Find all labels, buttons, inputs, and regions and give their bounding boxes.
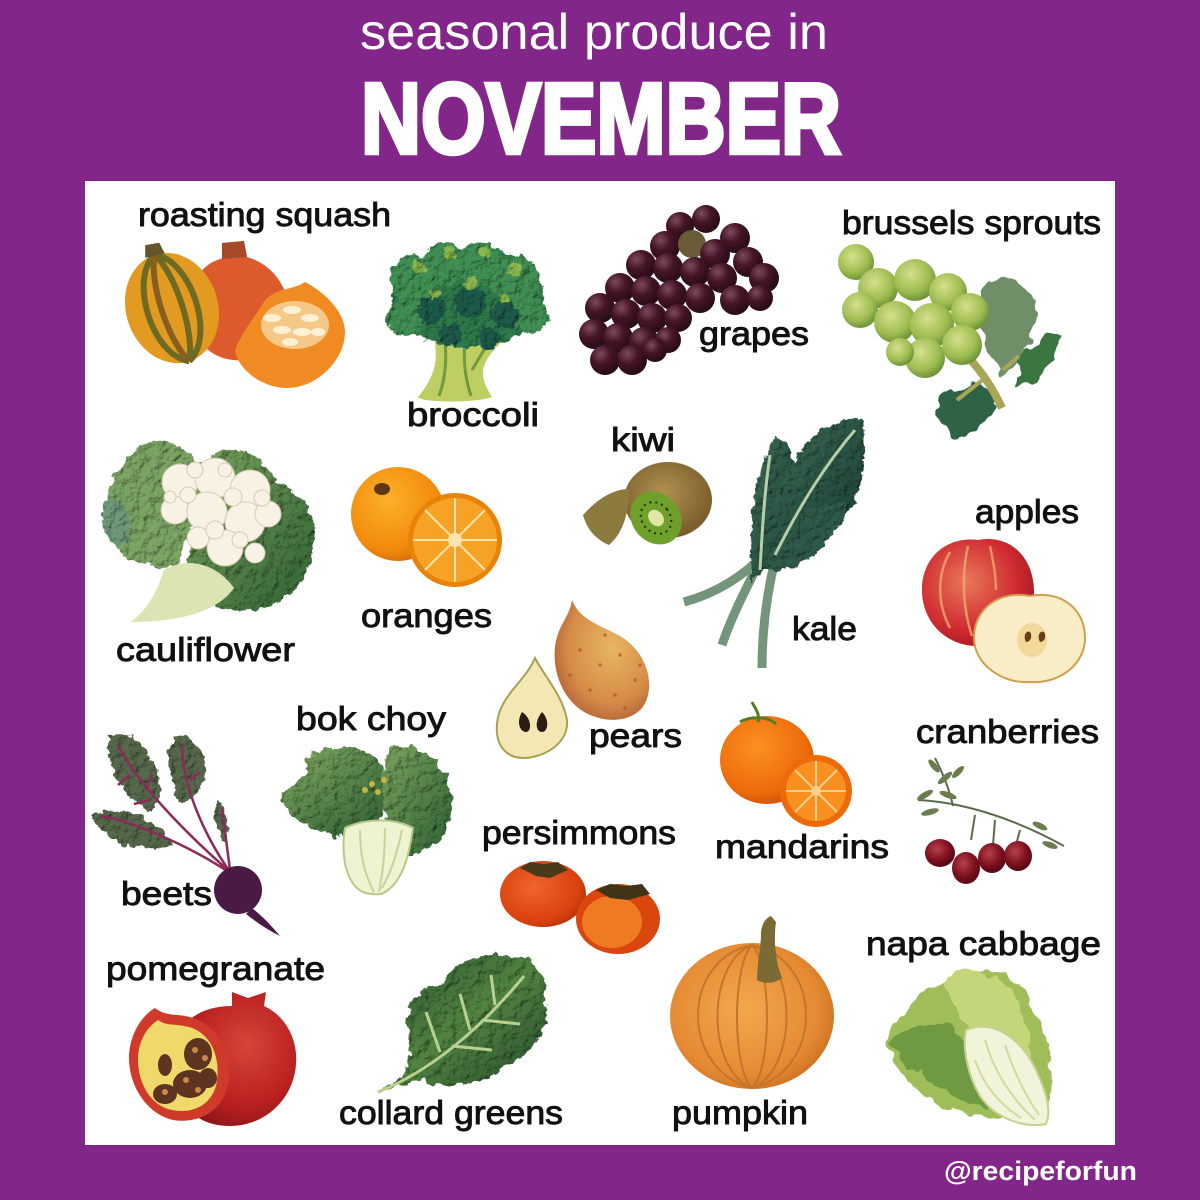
icon: second persimmon — [576, 884, 660, 954]
label: persimmons — [482, 814, 676, 851]
icon: broccoli stem — [418, 325, 510, 402]
icon: acorn squash — [107, 229, 233, 375]
icon: cut squash — [235, 282, 345, 388]
label: roasting squash — [138, 196, 391, 233]
persimmons — [482, 814, 676, 954]
label: cranberries — [916, 713, 1099, 750]
icon: whole persimmon — [500, 861, 586, 927]
icon: grape bunch — [579, 205, 779, 375]
white content panel — [85, 181, 1115, 1145]
pears — [497, 600, 682, 758]
label: oranges — [361, 597, 492, 634]
label: beets — [121, 875, 212, 912]
icon: cabbage leaves — [885, 969, 1051, 1121]
apples — [922, 493, 1085, 682]
label: mandarins — [715, 828, 889, 865]
beets — [90, 734, 280, 936]
icon: cut face — [129, 1008, 229, 1121]
icon: pumpkin body — [670, 943, 834, 1089]
icon: white cabbage heart — [965, 1027, 1048, 1125]
label: grapes — [699, 315, 809, 352]
icon: beet root — [214, 866, 280, 936]
brussels sprouts — [838, 204, 1101, 438]
icon: kale stems — [684, 550, 776, 668]
icon: sprouts — [838, 244, 989, 378]
icon: red apple — [922, 539, 1034, 646]
label: pears — [589, 717, 682, 754]
icon: outer leaves — [103, 441, 315, 622]
collard greens — [339, 955, 563, 1131]
icon: kiwi wedge — [583, 489, 629, 545]
cranberries — [916, 713, 1099, 884]
icon: mandarin half — [780, 755, 852, 827]
label: kale — [792, 610, 857, 647]
label: broccoli — [407, 396, 539, 433]
icon: orange half — [408, 493, 502, 587]
icon: halved pear — [497, 658, 567, 758]
icon: berries — [925, 839, 1032, 884]
icon: whole red kuri squash — [191, 241, 289, 360]
title: NOVEMBER: NOVEMBER — [361, 63, 841, 175]
label: cauliflower — [116, 631, 295, 668]
icon: leaf stems — [100, 745, 230, 873]
label: collard greens — [339, 1094, 563, 1131]
icon: whole pear — [555, 600, 649, 720]
title line: seasonal produce in: seasonal produce in — [360, 4, 828, 60]
kale — [684, 418, 864, 668]
oranges — [351, 467, 502, 634]
label: pomegranate — [106, 950, 325, 987]
label: pumpkin — [672, 1094, 808, 1131]
napa cabbage — [866, 925, 1101, 1125]
roasting squash — [107, 196, 391, 388]
icon: whole kiwi — [624, 462, 712, 538]
credit handle: @recipeforfun — [944, 1156, 1137, 1186]
kiwi — [583, 421, 712, 555]
icon: collard leaf — [378, 955, 546, 1092]
label: apples — [975, 493, 1079, 530]
pumpkin — [670, 916, 834, 1131]
label: brussels sprouts — [842, 204, 1101, 241]
icon: leaves — [280, 746, 452, 856]
icon: leaves and stalk — [937, 279, 1060, 438]
icon: kale leaves — [750, 418, 864, 583]
icon: pomegranate body — [172, 992, 296, 1126]
icon: beet leaves — [90, 734, 228, 849]
icon: white curd — [161, 458, 281, 566]
icon: white stalk — [344, 820, 413, 894]
broccoli — [387, 242, 548, 433]
icon: whole orange — [351, 467, 445, 561]
bok choy — [280, 700, 452, 894]
grapes — [579, 205, 809, 375]
mandarins — [715, 702, 889, 865]
icon: kiwi slice — [620, 481, 692, 555]
icon: apple half — [974, 595, 1085, 682]
icon: branch — [916, 758, 1064, 851]
icon: whole mandarin — [720, 702, 814, 804]
cauliflower — [103, 441, 315, 668]
icon: yellow flower buds — [362, 777, 387, 795]
label: napa cabbage — [866, 925, 1101, 962]
label: bok choy — [296, 700, 447, 737]
icon: kale midribs — [760, 430, 855, 570]
icon: stem — [757, 916, 782, 983]
icon: broccoli florets — [387, 242, 548, 349]
pomegranate — [106, 950, 325, 1126]
label: kiwi — [611, 421, 675, 458]
